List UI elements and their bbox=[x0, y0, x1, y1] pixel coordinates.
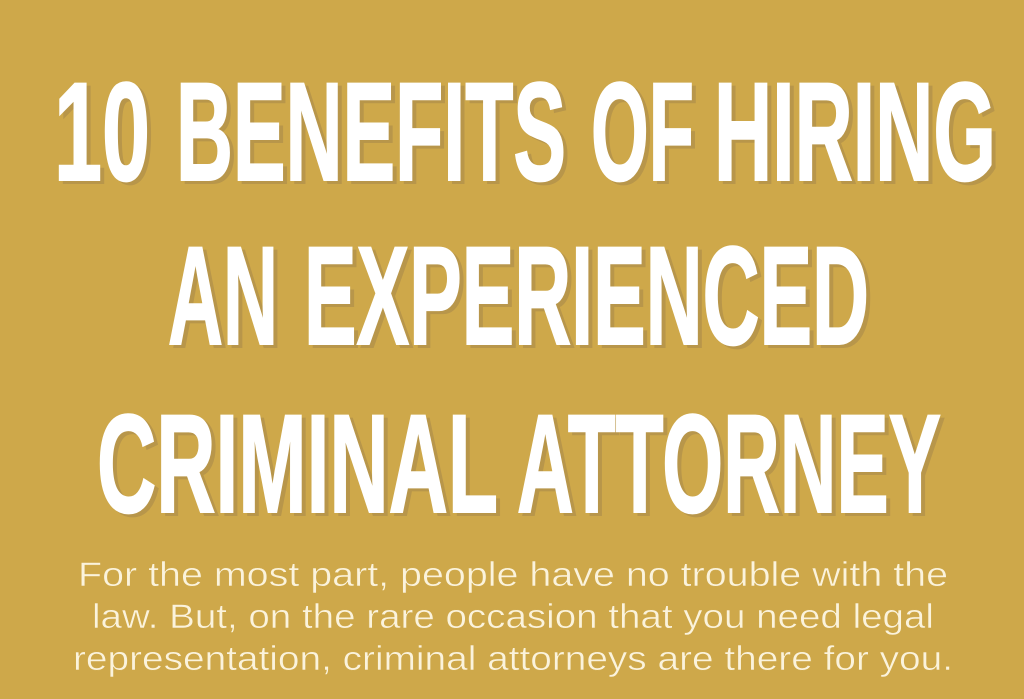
title line 3: CRIMINAL bbox=[101, 388, 502, 545]
title line 1: BENEFITS bbox=[180, 56, 570, 213]
title line 1: 10 bbox=[54, 53, 150, 210]
title line 2 bbox=[168, 217, 873, 377]
title line 1: OF bbox=[591, 53, 694, 210]
title line 1: BENEFITS bbox=[176, 53, 566, 210]
title line 2: AN bbox=[168, 217, 278, 374]
title line 2: AN bbox=[172, 220, 282, 377]
title bbox=[54, 53, 1000, 545]
intro text block: representation, criminal attorneys are there for you. bbox=[73, 640, 953, 678]
intro text block: For the most part, people have no trouble with the bbox=[78, 556, 948, 594]
title line 1: 10 bbox=[58, 56, 154, 213]
title line 1: OF bbox=[595, 56, 698, 213]
intro text block bbox=[73, 556, 953, 678]
intro text block: law. But, on the rare occasion that you need legal bbox=[92, 598, 934, 636]
title line 3: CRIMINAL bbox=[97, 385, 498, 542]
